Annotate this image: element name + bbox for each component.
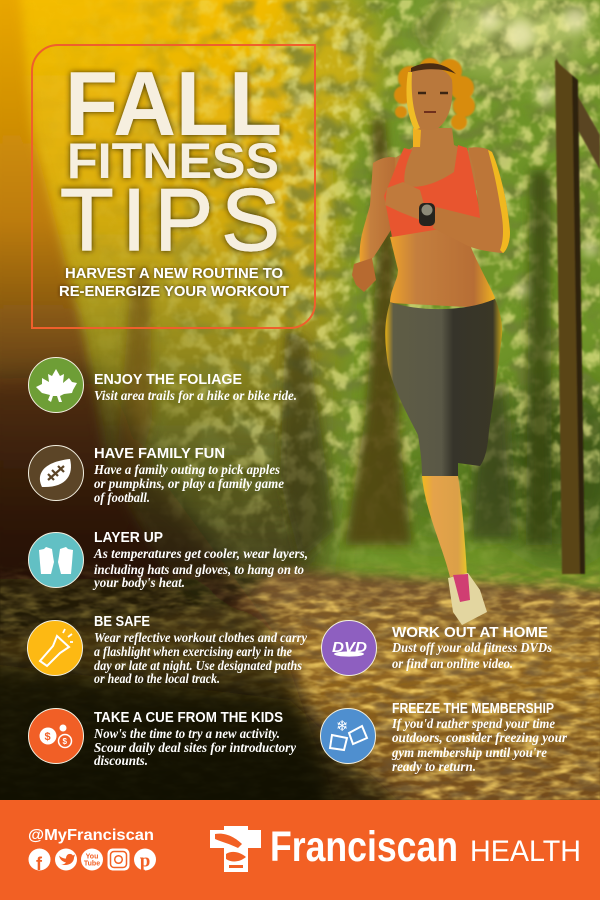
icon: coins [28, 708, 84, 764]
tip: freeze the membership: FREEZE THE MEMBERSHIP [392, 701, 554, 717]
title: Fall Fitness Tips: FITNESS [67, 133, 279, 189]
tip: take a cue from the kids: discounts. [94, 753, 148, 768]
tip: layer up: LAYER UP [94, 530, 163, 546]
right arm [433, 147, 510, 253]
tip: freeze the membership: outdoors, consider freezing your [392, 730, 568, 745]
icon: youtube: Tube [84, 860, 100, 868]
tip: enjoy the foliage: Visit area trails for a hike or bike ride. [94, 388, 297, 403]
logo: Franciscan Health wordmark: Franciscan [270, 823, 458, 871]
tip: freeze the membership [320, 701, 568, 774]
icon: football [28, 446, 84, 500]
tip: enjoy the foliage [28, 358, 297, 412]
social handle: @MyFranciscan [28, 827, 154, 844]
icon: maple leaf [28, 358, 84, 412]
tip: take a cue from the kids: Scour daily deal sites for introductory [94, 740, 297, 755]
tip: enjoy the foliage: ENJOY THE FOLIAGE [94, 372, 242, 388]
face [408, 67, 452, 130]
icon: DVD [322, 620, 376, 676]
shoe [448, 573, 487, 625]
tip: have family fun: of football. [94, 490, 150, 505]
icon: instagram [108, 848, 130, 870]
tip: be safe: Wear reflective workout clothes and carry [94, 630, 308, 645]
tip: layer up: including hats and gloves, to hang on to [94, 562, 304, 577]
lower leg [422, 476, 467, 577]
subtitle: RE-ENERGIZE YOUR WORKOUT [59, 283, 289, 300]
tip: have family fun: or pumpkins, or play a family game [94, 476, 284, 491]
icon: DVD: DVD [332, 639, 367, 656]
logo: Franciscan cross [210, 826, 261, 872]
tip: take a cue from the kids [28, 708, 297, 768]
tip: freeze the membership: If you'd rather spend your time [391, 716, 555, 731]
dark vignette [0, 370, 345, 830]
logo: Franciscan Health wordmark: HEALTH [470, 835, 581, 868]
icon: twitter [55, 848, 77, 870]
tip: be safe: a flashlight when exercising early in the [94, 644, 292, 659]
tip: be safe [28, 614, 308, 686]
background trees [112, 0, 552, 560]
title: Fall Fitness Tips: FALL [65, 54, 282, 155]
runner photo [352, 58, 510, 625]
icon: youtube: You [86, 854, 98, 860]
neck and chest [395, 128, 480, 195]
torso [390, 228, 495, 308]
title: Fall Fitness Tips [60, 54, 282, 269]
tip: freeze the membership: ready to return. [392, 759, 476, 774]
tip: have family fun: HAVE FAMILY FUN [94, 446, 225, 462]
tip: freeze the membership: gym membership until you're [391, 745, 547, 760]
tip: work out at home [322, 620, 552, 676]
icon: pinterest: p [140, 850, 150, 872]
icon: ice cubes [320, 708, 376, 764]
icon: coins: $ [62, 737, 68, 746]
watch [419, 203, 435, 226]
tip: work out at home: WORK OUT AT HOME [392, 625, 548, 641]
title: Fall Fitness Tips: TIPS [60, 170, 280, 269]
footer band [0, 800, 600, 900]
social icons [28, 848, 156, 874]
tip: be safe: or head to the local track. [94, 671, 220, 686]
wooden post and rail [555, 58, 600, 574]
tip: be safe: BE SAFE [94, 614, 150, 630]
tip: take a cue from the kids: TAKE A CUE FROM THE KIDS [94, 710, 283, 726]
leggings [385, 299, 502, 476]
icon: coins: $ [44, 731, 51, 743]
tip: layer up: your body's heat. [92, 575, 185, 590]
tip: work out at home: or find an online video. [392, 656, 513, 671]
title box outline [32, 45, 315, 328]
hair [394, 58, 475, 130]
tip: take a cue from the kids: Now's the time to try a new activity. [93, 726, 280, 741]
subtitle: HARVEST A NEW ROUTINE TO [65, 265, 283, 282]
tip: layer up [28, 530, 308, 590]
forest floor [0, 560, 600, 810]
icon: youtube [81, 848, 103, 870]
large tree trunk at left [0, 0, 260, 810]
left arm and hand [360, 157, 403, 262]
tip: have family fun: Have a family outing to pick apples [93, 462, 280, 477]
tip: have family fun [28, 446, 284, 505]
icon: ice cubes: ❄ [336, 717, 349, 735]
icon: gloves [28, 532, 84, 588]
sports bra [384, 145, 481, 237]
icon: flashlight [28, 620, 82, 676]
icon: facebook: f [36, 854, 43, 874]
tip: layer up: As temperatures get cooler, wear layers, [93, 546, 308, 561]
subtitle [59, 265, 289, 300]
tip: work out at home: Dust off your old fitness DVDs [391, 640, 552, 655]
fist [385, 182, 425, 220]
tip: be safe: day or late at night. Use designated paths [94, 658, 302, 673]
